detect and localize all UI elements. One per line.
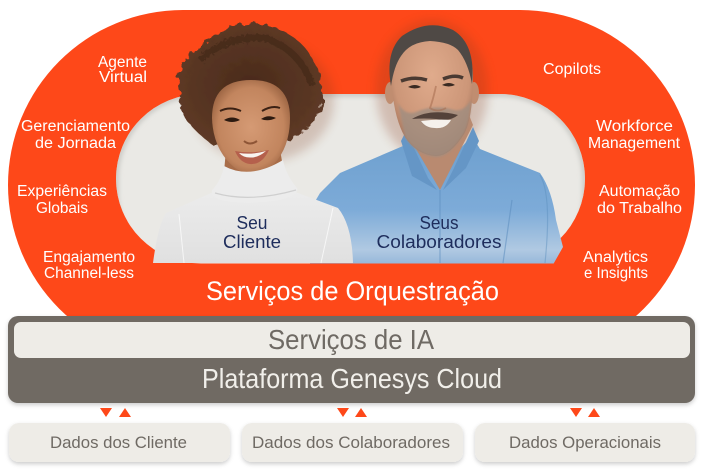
panel: Genesys Cloud platform bar — [8, 316, 695, 403]
card: Dados dos Cliente: Dados dos Cliente — [50, 433, 187, 452]
label: Seu Cliente — [223, 213, 281, 252]
torso — [153, 200, 353, 263]
label: Experiências Globais: Globais — [36, 200, 88, 217]
label: Gerenciamento de Jornada: de Jornada — [35, 135, 116, 152]
label: Gerenciamento de Jornada — [21, 118, 130, 152]
head — [391, 32, 473, 156]
label: Engajamento Channel-less: Channel-less — [44, 265, 134, 282]
label: Analytics e Insights — [583, 249, 648, 282]
collar — [401, 127, 479, 190]
card: Dados dos Cliente — [9, 423, 230, 462]
card: Dados dos Colaboradores — [242, 423, 463, 462]
label: Analytics e Insights: Analytics — [583, 249, 648, 266]
label: Experiências Globais: Experiências — [17, 183, 107, 200]
panel: AI services bar — [14, 322, 690, 358]
arrows: employee data — [337, 408, 367, 417]
label: Seus Colaboradores: Colaboradores — [376, 232, 502, 252]
neck — [224, 154, 282, 172]
label: Seus Colaboradores — [376, 213, 502, 252]
heading: Serviços de IA: Serviços de IA — [268, 324, 434, 355]
card: Dados dos Colaboradores: Dados dos Colaboradores — [252, 433, 450, 452]
shirt — [310, 136, 563, 270]
moustache and smile — [412, 112, 458, 120]
ears — [385, 82, 394, 104]
neck — [416, 116, 473, 190]
turtleneck — [224, 160, 284, 174]
illustration: man, Seus Colaboradores — [310, 20, 563, 270]
eyebrows — [220, 107, 280, 111]
nose — [430, 86, 446, 110]
label: Automação do Trabalho: do Trabalho — [597, 200, 682, 217]
label: Automação do Trabalho: Automação — [599, 183, 680, 200]
eyebrows — [401, 76, 463, 81]
heading: Serviços de Orquestração: Serviços de Orquestração — [206, 276, 499, 306]
label: Seu Cliente: Cliente — [223, 232, 281, 252]
label: Engajamento Channel-less: Engajamento — [43, 249, 135, 266]
heading: Plataforma Genesys Cloud: Plataforma Genesys Cloud — [202, 363, 502, 394]
label: Copilots: Copilots — [543, 61, 601, 78]
left capability labels — [17, 54, 147, 282]
hair — [178, 24, 323, 146]
label: Workforce Management: Workforce — [596, 118, 673, 135]
label: Agente Virtual — [98, 54, 147, 86]
face — [212, 80, 290, 174]
hair — [389, 25, 473, 86]
beard — [398, 100, 471, 157]
arrows: customer data — [100, 408, 131, 417]
label: Gerenciamento de Jornada: Gerenciamento — [21, 118, 130, 135]
panel: inner light window — [116, 94, 585, 279]
label: Agente Virtual: Agente — [98, 54, 147, 71]
illustration: woman, Seu Cliente — [153, 24, 353, 263]
label: Engajamento Channel-less — [43, 249, 135, 282]
label: Agente Virtual: Virtual — [99, 69, 147, 86]
label: Seu Cliente: Seu — [236, 213, 268, 233]
eyes — [224, 116, 276, 122]
card: Dados Operacionais — [475, 423, 695, 462]
panel: orchestration ring — [8, 10, 695, 360]
nose — [244, 141, 257, 144]
label: Experiências Globais — [17, 183, 107, 217]
label: Workforce Management — [588, 118, 681, 152]
label: Analytics e Insights: e Insights — [584, 265, 648, 282]
eyes — [408, 83, 455, 88]
label: Seus Colaboradores: Seus — [420, 213, 458, 233]
arrows: operational data — [570, 408, 600, 417]
card: Dados Operacionais: Dados Operacionais — [509, 433, 661, 452]
label: Automação do Trabalho — [597, 183, 682, 217]
label: Workforce Management: Management — [588, 135, 681, 152]
right capability labels — [543, 61, 682, 282]
lips and teeth — [235, 150, 269, 164]
